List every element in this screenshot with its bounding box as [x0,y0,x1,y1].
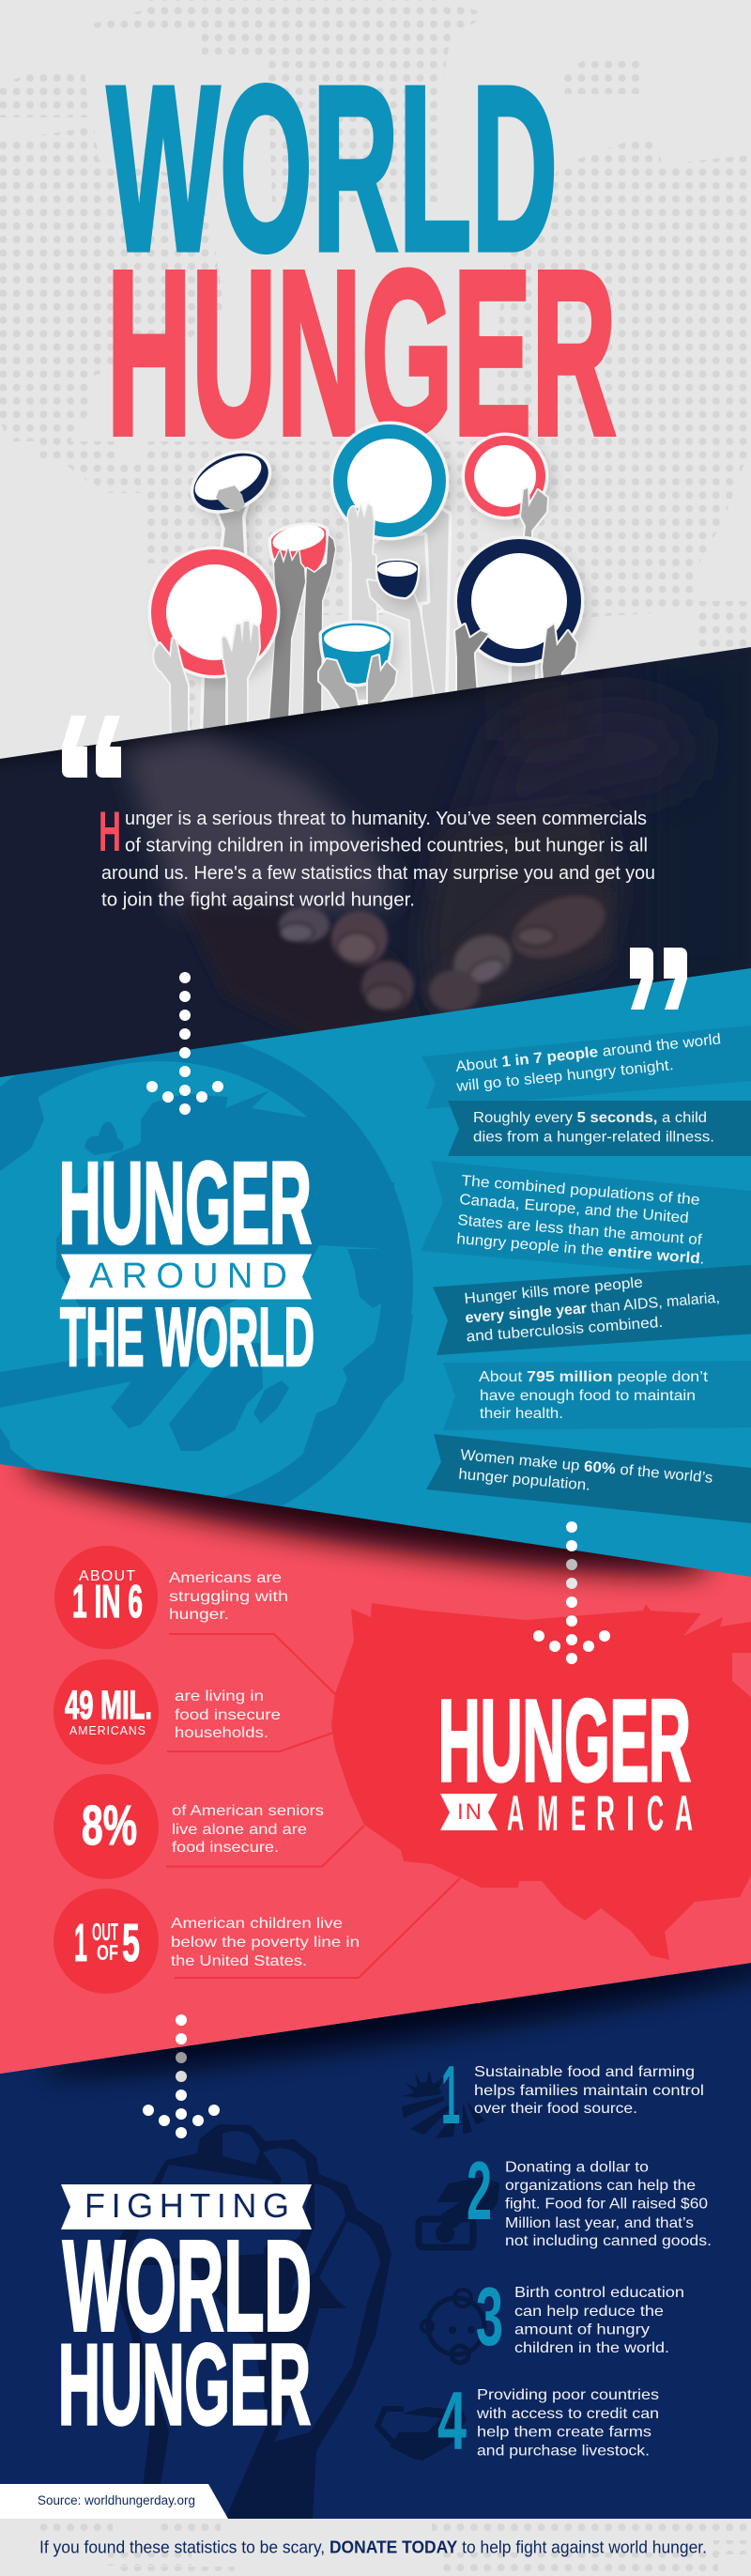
arm: holding navy bowl [216,486,246,554]
stat: 1 out of 5: American children live [171,1916,343,1932]
stat ribbon 1: About 1 in 7 people around the world [455,1031,722,1075]
red background [0,1456,751,2074]
item 4: access to credit: Providing poor countries [477,2387,659,2403]
stat: 1 in 6: struggling with [169,1589,288,1605]
stat: 49 million [54,1659,281,1765]
item 1: sustainable farming [402,2048,704,2141]
item 3: birth control: children in the world. [514,2340,669,2356]
item 3: birth control: Birth control education [514,2285,684,2301]
arrow: dotted down to fighting section [143,2014,220,2138]
source tag: Source: worldhungerday.org [38,2493,195,2507]
stat ribbon 5: have enough food to maintain [480,1388,696,1404]
banner: AROUND [61,1255,312,1300]
paragraph lines [101,809,655,911]
stat: 1 out of 5: the United States. [171,1953,307,1969]
stat: 8 percent: live alone and are [172,1822,307,1838]
icon: hand with money [419,2177,499,2247]
item 3: birth control: 3 [476,2270,503,2363]
source tag [0,2484,228,2519]
right hand fingertips [428,894,606,1012]
item 4: access to credit: with access to credit can [476,2406,659,2422]
stat: 1 in 6: 1 IN 6 [72,1577,143,1627]
quote mark: close [630,948,687,1010]
panel: hunger in America (red) [0,1431,751,2074]
shadow under red section [38,1963,751,2090]
stat: 49 million: AMERICANS [69,1724,146,1737]
plate: big navy [457,539,581,663]
item 2: donating: organizations can help the [505,2178,696,2194]
illustration: hands holding empty plates and bowls [151,424,581,747]
bowl: navy tilted [185,442,277,521]
bowl: teal [322,624,391,684]
hands: holding big red plate [154,622,259,747]
stat ribbon 3: States are less than the amount of [457,1212,703,1248]
item 4: access to credit: and purchase livestock. [477,2444,650,2459]
navy background [0,1963,751,2519]
word: AMERICA: A [507,1786,524,1842]
item 2: donating: Donating a dollar to [505,2160,649,2175]
stat: 1 in 6: ABOUT [79,1568,135,1584]
plate: big red [151,549,277,675]
stat: 49 million: are living in [175,1689,264,1704]
stat: 49 million: food insecure [175,1707,281,1723]
stat: 1 out of 5 [54,1889,360,1994]
stat: 49 million: 49 MIL. [65,1683,152,1728]
stat: 8 percent: food insecure. [172,1840,279,1856]
map: United States [331,1603,751,1960]
stat ribbon 3: Canada, Europe, and the United [459,1192,689,1226]
stat: 1 out of 5: below the poverty line in [171,1935,360,1951]
quote mark: open [62,716,121,778]
stat: 1 out of 5: OUT [92,1918,118,1946]
item 1: sustainable farming: helps families maintain control [474,2083,704,2099]
heading: HUNGER AROUND THE WORLD [59,1140,314,1383]
stat ribbon 4: Hunger kills more people [464,1274,644,1307]
paragraph lines: to join the fight against world hunger. [101,890,415,911]
item 2: donating [419,2144,712,2249]
arms: dark gray pair [269,535,335,723]
stat: 8 percent [54,1774,324,1879]
stat ribbon 1: will go to sleep hungry tonight. [455,1057,674,1095]
panel: hunger in America (red): A [675,1786,693,1842]
title: WORLD HUNGER [107,38,617,484]
stat ribbon 5 [443,1361,751,1430]
paragraph lines: unger is a serious threat to humanity. You’ve seen commercials [125,809,647,829]
heading: HUNGER AROUND THE WORLD: AROUND [89,1257,287,1296]
arrow: dotted down to world section [146,972,223,1115]
item 2: donating: fight. Food for All raised $60 [505,2196,708,2213]
word: AMERICA [507,1786,693,1842]
stat ribbon 6 [426,1434,751,1523]
stat: 1 out of 5: 1 [74,1913,87,1973]
photo background [0,647,751,1089]
arms: center back pale [203,507,542,742]
stat: 1 in 6: Americans are [169,1570,282,1586]
footer call to action: If you found these statistics to be scary, DONATE TODAY to help fight against world hunger. [39,2537,707,2556]
icon: farm and sun [402,2070,485,2138]
item 3: birth control: can help reduce the [514,2304,664,2320]
item 2: donating: 2 [467,2144,492,2237]
heading: FIGHTING banner: FIGHTING [84,2186,289,2225]
stat ribbon 3: The combined populations of the [461,1173,700,1209]
drop cap H: H [99,800,121,863]
item 1: sustainable farming: 1 [441,2048,460,2141]
banner: IN [440,1794,498,1830]
word: AMERICA: C [647,1786,664,1842]
stat ribbon 6: hunger population. [458,1467,591,1494]
stat: 1 in 6 [54,1546,288,1649]
stat: 1 out of 5: OF [97,1940,118,1965]
connector lines [166,1634,460,1978]
bowl: red [270,520,327,578]
item 4: access to credit [377,2374,659,2467]
globe illustration [0,1046,413,1521]
arm: small navy cup holder [368,580,434,700]
stat ribbon 5: their health. [480,1406,563,1422]
heading: FIGHTING banner [61,2184,312,2229]
stat ribbon 2: Roughly every 5 seconds, a child [473,1110,707,1126]
hand: on small red plate [521,488,547,549]
word: AMERICA: E [571,1786,586,1842]
stat ribbon 4: and tuberculosis combined. [466,1315,664,1345]
heading: HUNGER IN AMERICA [438,1677,693,1842]
stat ribbon 2: dies from a hunger-related illness. [473,1129,714,1146]
arrow: dotted down to America section [533,1521,610,1664]
heading: WORLD HUNGER: HUNGER [58,2321,311,2448]
heading: HUNGER IN AMERICA: IN [457,1799,482,1825]
hand: on teal plate [348,504,378,700]
shadow under blue section [8,1465,723,1597]
stat ribbon 4: every single year than AIDS, malaria, [465,1290,720,1326]
item 4: access to credit: help them create farms [477,2425,651,2441]
teal background [0,968,751,1577]
photo: cupped hands [0,647,750,1033]
item 2: donating: not including canned goods. [505,2233,712,2249]
left hand fingertips [279,907,414,1011]
stat: 1 in 6: hunger. [169,1607,229,1623]
icon: handshake [377,2407,467,2460]
stat ribbon 3: hungry people in the entire world . [456,1231,705,1268]
word: AMERICA: M [537,1786,559,1842]
word: AMERICA: I [626,1786,635,1842]
item 2: donating: Million last year, and that’s [505,2215,694,2231]
item 1: sustainable farming: Sustainable food and farming [474,2064,695,2080]
heading: WORLD HUNGER [58,2214,312,2448]
item 4: access to credit: 4 [437,2374,467,2467]
item 3: birth control [421,2270,684,2363]
icon: baby face [421,2290,484,2363]
heading: HUNGER AROUND THE WORLD: THE WORLD [60,1290,314,1383]
stat: 1 out of 5: 5 [122,1913,140,1973]
paragraph lines: around us. Here's a few statistics that may surprise you and get you [101,863,655,884]
stat ribbon 4 [433,1265,751,1355]
cup: small navy [377,561,418,597]
stat ribbon 2 [448,1101,751,1156]
item 3: birth control: amount of hungry [514,2321,650,2338]
plate: small red [465,436,545,517]
heading: WORLD HUNGER: WORLD [63,2214,312,2357]
stat ribbon 3 [421,1161,751,1279]
stat: 49 million: households. [175,1725,268,1741]
panel: intro dark photo section [0,647,751,1077]
heading: HUNGER AROUND THE WORLD: HUNGER [59,1140,312,1269]
stat ribbon 5: About 795 million people don’t [479,1369,709,1385]
word: AMERICA: R [596,1786,615,1842]
stat: 8 percent: 8% [82,1795,137,1857]
stat ribbon 1 [421,1026,751,1109]
icon: raised fist [106,2124,391,2519]
stat: 8 percent: of American seniors [172,1803,324,1819]
paragraph lines: of starving children in impoverished countries, but hunger is all [125,836,648,856]
hands: holding navy plate [455,625,576,695]
hands: holding teal bowl [319,656,396,712]
intro paragraph [99,800,655,911]
plate: teal [333,424,446,537]
panel: hunger around the world (teal) [0,968,751,1577]
item 1: sustainable farming: over their food source. [474,2101,637,2117]
stat ribbon 6: Women make up 60% of the world’s [460,1447,713,1487]
panel: fighting world hunger (navy) [0,1937,751,2519]
